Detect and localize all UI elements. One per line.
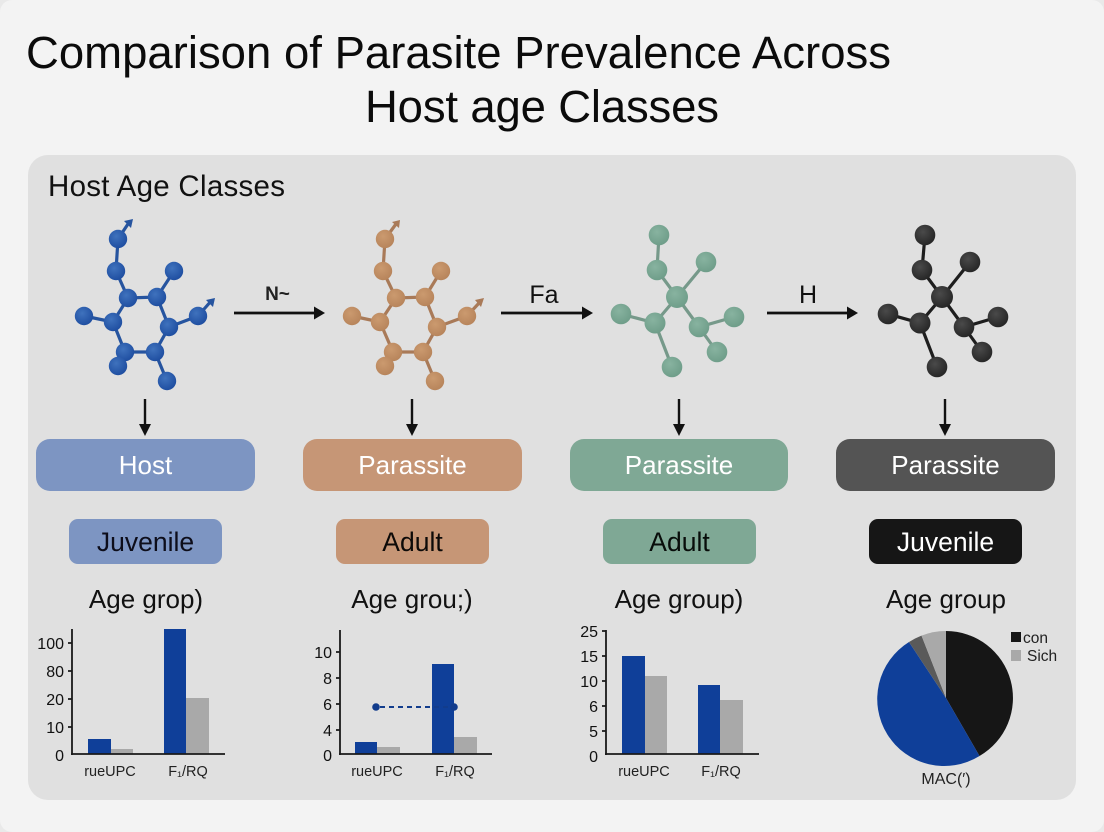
box: parasite green: Parassite xyxy=(625,450,733,480)
heading: age group 4: Age group xyxy=(886,584,1006,614)
title: Host age Classes xyxy=(365,81,719,132)
arrow: blue to tan: N~ xyxy=(265,284,290,305)
bar chart 1: 10 xyxy=(46,720,64,737)
label: adult green: Adult xyxy=(649,527,710,557)
label: juvenile blue: Juvenile xyxy=(97,527,194,557)
label: adult tan: Adult xyxy=(382,527,443,557)
bar chart 2: F₁/RQ xyxy=(435,764,475,780)
bar chart 2: 10 xyxy=(314,645,332,662)
box: parasite tan: Parassite xyxy=(358,450,467,480)
bar chart 1: 80 xyxy=(46,664,64,681)
panel heading: Host Age Classes xyxy=(48,170,285,203)
arrow: tan to green: Fa xyxy=(529,281,559,309)
bar chart 1: 100 xyxy=(37,636,64,653)
pie legend xyxy=(1011,630,1057,665)
pie legend: con xyxy=(1023,630,1048,647)
box: parasite tan xyxy=(303,439,522,491)
title xyxy=(26,27,891,132)
box: parasite dark: Parassite xyxy=(891,450,1000,480)
pie legend: Sich xyxy=(1027,648,1057,665)
bar chart 3: 10 xyxy=(580,674,598,691)
label: adult tan xyxy=(336,519,489,564)
bar chart 1: F₁/RQ xyxy=(168,764,208,780)
arrow: green to black: H xyxy=(799,281,817,309)
label: juvenile blue xyxy=(69,519,222,564)
icon: black molecule xyxy=(878,225,1008,377)
bar chart 2: rueUPC xyxy=(351,764,403,780)
icon: green molecule xyxy=(611,225,744,377)
bar chart 2: 8 xyxy=(323,671,332,688)
icon: blue molecule xyxy=(75,219,215,390)
label: adult green xyxy=(603,519,756,564)
label: juvenile dark: Juvenile xyxy=(897,527,994,557)
bar chart 3: F₁/RQ xyxy=(701,764,741,780)
bar chart 1: 0 xyxy=(55,748,64,765)
bar chart 3: rueUPC xyxy=(618,764,670,780)
box: parasite green xyxy=(570,439,788,491)
arrow: down 1 xyxy=(139,399,151,436)
bar chart 3: 5 xyxy=(589,724,598,741)
bar chart 3: 15 xyxy=(580,649,598,666)
arrow: blue to tan xyxy=(234,284,325,320)
pie caption: MAC(′) xyxy=(921,771,971,788)
arrow: tan to green xyxy=(501,281,593,320)
heading: age group 2: Age grou;) xyxy=(351,584,473,614)
bar chart 2 xyxy=(314,630,492,780)
bar chart 1: rueUPC xyxy=(84,764,136,780)
box: parasite dark xyxy=(836,439,1055,491)
pie chart xyxy=(877,630,1057,788)
arrow: green to black xyxy=(767,281,858,320)
bar chart 1 xyxy=(37,629,225,780)
heading: age group 3: Age group) xyxy=(615,584,743,614)
title: Comparison of Parasite Prevalence Across xyxy=(26,27,891,78)
bar chart 2: 4 xyxy=(323,723,332,740)
bar chart 2: 0 xyxy=(323,748,332,765)
bar chart 3: 0 xyxy=(589,749,598,766)
box: host: Host xyxy=(119,450,173,480)
bar chart 3: 25 xyxy=(580,624,598,641)
bar chart 3 xyxy=(580,624,759,780)
icon: tan molecule xyxy=(343,220,484,390)
heading: age group 1: Age grop) xyxy=(89,584,203,614)
bar chart 2: 6 xyxy=(323,697,332,714)
label: juvenile dark xyxy=(869,519,1022,564)
arrow: down 3 xyxy=(673,399,685,436)
dotted marker line xyxy=(372,703,458,711)
arrow: down 4 xyxy=(939,399,951,436)
bar chart 3: 6 xyxy=(589,699,598,716)
arrow: down 2 xyxy=(406,399,418,436)
bar chart 1: 20 xyxy=(46,692,64,709)
box: host xyxy=(36,439,255,491)
panel: host age classes xyxy=(28,155,1076,800)
